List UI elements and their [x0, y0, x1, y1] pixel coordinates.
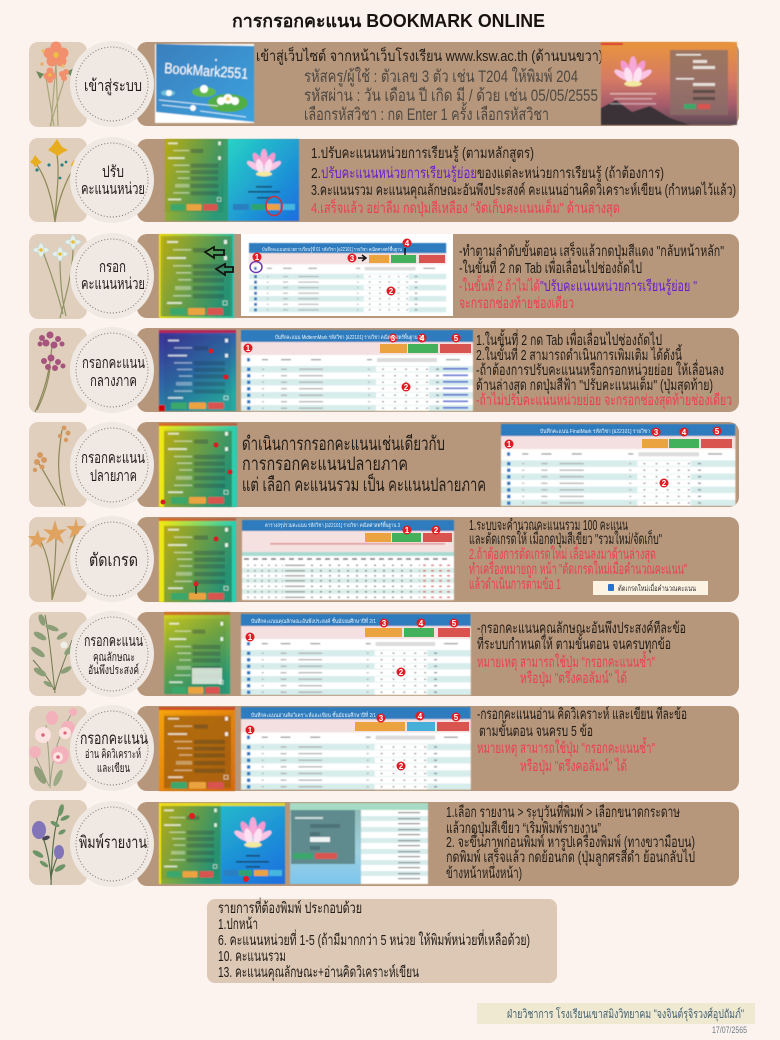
screenshot: score table: 5 — [715, 427, 720, 436]
screenshot: score table: 3 — [350, 254, 355, 263]
screenshot: score table: 4 — [418, 712, 423, 721]
text: steps — [311, 145, 736, 218]
screenshot: side form — [159, 330, 236, 411]
highlight circle — [266, 196, 282, 216]
text: description: การกรอกคะแนนปลายภาค — [242, 454, 408, 475]
text: website instructions — [256, 46, 603, 124]
screenshot: score table: 5 — [452, 619, 457, 628]
circle label: และเขียน — [97, 761, 130, 775]
text: steps: หมายเหตุ สามารถใช้ปุ่ม "กรอกคะแนนซ้ำ" — [477, 737, 655, 758]
circle label — [70, 137, 154, 223]
main bar — [137, 517, 739, 602]
screenshot: score table: 1 — [246, 344, 251, 353]
text: steps: ปรับคะแนนหน่วยการเรียนรู้ย่อย — [321, 165, 477, 182]
screenshot: side form — [164, 612, 230, 696]
text: steps: ตามขั้นตอน จนครบ 5 ข้อ — [479, 720, 593, 740]
circle label: ตัดเกรด — [89, 550, 138, 570]
flower panel — [29, 138, 87, 222]
screenshot: print preview — [290, 803, 428, 884]
text: description — [242, 433, 486, 496]
checkbox callout — [593, 581, 708, 595]
text: steps — [459, 240, 724, 312]
text: steps: 1.ในขั้นที่ 2 กด Tab เพื่อเลื่อนไปช่องถัดไป — [476, 329, 662, 349]
screenshot: score table: 3 — [654, 428, 659, 437]
circle label — [70, 233, 154, 319]
flower panel — [29, 706, 87, 791]
circle label — [70, 327, 154, 413]
main bar — [137, 234, 739, 318]
circle label: กรอกคะแนน — [80, 729, 148, 748]
circle label: ปรับ — [102, 164, 124, 181]
flower panel — [29, 234, 87, 319]
text: steps: -ในขั้นที่ 2 กด Tab เพื่อเลื่อนไปช่องถัดไป — [459, 257, 642, 277]
text: website instructions: เลือกรหัสวิชา : กด Enter 1 ครั้ง เลือกรหัสวิชา — [304, 102, 549, 124]
text: steps: ข้างหน้าหนึ่งหน้า) — [446, 862, 522, 882]
flower panel — [29, 328, 87, 413]
panel: items to print: 13. คะแนนคุณลักษณะ+อ่านคิดวิเคราะห์เขียน — [218, 964, 419, 982]
circle label: คะแนนหน่วย — [81, 276, 145, 293]
footer: date: 17/07/2565 — [712, 1025, 747, 1035]
panel: items to print: รายการที่ต้องพิมพ์ ประกอบด้วย — [218, 897, 362, 917]
image: BookMark2551 banner — [155, 44, 254, 123]
screenshot: side form — [159, 234, 234, 318]
panel: items to print: 1.ปกหน้า — [218, 916, 258, 933]
circle label: อ่าน คิดวิเคราะห์ — [85, 747, 141, 761]
circle label: ปลายภาค — [90, 468, 137, 485]
text: steps — [476, 329, 732, 410]
text: steps: 4.เสร็จแล้ว อย่าลืม กดปุ่มสีเหลือง "จัดเก็บคะแนนเต็ม" ด้านล่างสุด — [311, 198, 620, 218]
circle label: คุณลักษณะ — [93, 650, 135, 665]
screenshot: score table: 1 — [248, 633, 253, 642]
screenshot: score table: 1 — [255, 253, 260, 262]
text: steps — [477, 706, 687, 776]
circle label — [70, 801, 154, 887]
flower panel — [28, 517, 87, 602]
text: steps — [469, 517, 687, 593]
row 7: character scores — [29, 611, 739, 697]
screenshot: summary table: ตารางสรุปรวมคะแนน รหัสวิชา [อ22101] รายวิชา คณิตศาสตร์พื้นฐาน 3 — [265, 521, 400, 529]
screenshot: score table: บันทึกคะแนนคุณลักษณะอันพึงประสงค์ ชั้นมัธยมศึกษาปีที่ 2/1 — [251, 617, 376, 625]
main bar — [137, 706, 739, 791]
screenshot: score table — [241, 234, 453, 316]
circle label: เข้าสู่ระบบ — [84, 77, 142, 96]
screenshot: summary table: 1 — [405, 526, 410, 535]
row 2: adjust unit scores — [29, 137, 739, 223]
arrow icons — [205, 247, 233, 275]
screenshot: score table: 2 — [389, 287, 394, 296]
screenshot: summary table — [242, 520, 454, 600]
row 4: midterm — [29, 327, 739, 413]
row 3: enter unit scores — [29, 233, 739, 319]
row 8: reading, analysis, writing — [29, 705, 739, 791]
screenshot: score table: 1 — [248, 726, 253, 735]
circle label: คะแนนหน่วย — [81, 181, 145, 198]
screenshot: score table: 4 — [419, 619, 424, 628]
screenshot: score table: บันทึกคะแนน FinalMark รหัสวิชา [อ22101] รายวิชา — [540, 428, 650, 435]
text: steps — [446, 801, 695, 882]
flower panel — [29, 612, 87, 696]
circle label: กลางภาค — [90, 373, 137, 390]
screenshot: score table: 3 — [391, 334, 396, 343]
screenshot: score table: 3 — [379, 714, 384, 723]
text: website instructions: เข้าสู่เว็บไซต์ จากหน้าเว็บโรงเรียน www.ksw.ac.th (ด้านบนขวา) — [256, 46, 603, 65]
circle label — [70, 516, 154, 602]
main bar — [137, 139, 739, 222]
circle label — [70, 705, 154, 791]
screenshot: score settings — [165, 139, 299, 221]
screenshot: score table — [501, 424, 735, 506]
screenshot: score table: 4 — [405, 239, 410, 248]
title: การกรอกคะแนน BOOKMARK ONLINE — [232, 11, 545, 31]
screenshot: side form — [159, 423, 237, 507]
row 5: final term — [29, 422, 739, 508]
text: steps: หมายเหตุ สามารถใช้ปุ่ม "กรอกคะแนนซ้ำ" — [477, 651, 655, 672]
text: description: ดำเนินการกรอกคะแนนเช่นเดียวกับ — [242, 433, 445, 455]
flower panel — [29, 42, 87, 127]
text: steps: "ปรับคะแนนหน่วยการเรียนรู้ย่อย " — [540, 278, 697, 295]
screenshot: score table: 2 — [399, 762, 404, 771]
panel: items to print — [207, 897, 557, 983]
text: steps: ที่ระบบกำหนดให้ ตามขั้นตอน จนครบทุกข้อ — [477, 633, 671, 654]
screenshot: side form — [159, 518, 236, 602]
row 9: print report — [29, 800, 739, 887]
text: steps: 1.ระบบจะคำนวณคะแนนรวม 100 คะแนน — [469, 517, 628, 534]
circle label: กรอกคะแนน — [84, 633, 143, 650]
text: steps — [477, 620, 686, 688]
row 1: login — [29, 41, 739, 127]
markers on menu — [189, 813, 249, 882]
markers on form — [208, 348, 228, 380]
text: steps: -ในขั้นที่ 2 ถ้าไม่ได้ — [459, 275, 540, 295]
flower panel — [29, 422, 87, 507]
screenshot: summary table: 2 — [434, 526, 439, 535]
screenshot: score table: 5 — [454, 334, 459, 343]
text: steps: ของแต่ละหน่วยการเรียนรู้ (ถ้าต้องการ) — [477, 165, 664, 182]
screenshot: score table: 5 — [454, 713, 459, 722]
main bar — [137, 802, 739, 886]
image: BookMark2551 banner: BookMark2551 — [164, 60, 249, 83]
circle label — [70, 611, 154, 697]
screenshot: score table — [241, 707, 471, 790]
circle label: กรอกคะแนน — [82, 355, 145, 372]
text: steps: จะกรอกช่องท้ายช่องเดียว — [459, 295, 574, 312]
circle label — [70, 422, 154, 508]
text: steps: 2.ถ้าต้องการตัดเกรดใหม่ เลื่อนลงมาด้านล่างสุด — [469, 543, 656, 564]
circle label: กรอก — [99, 259, 126, 276]
screenshot: score table — [241, 614, 471, 695]
screenshot: score table: 2 — [404, 383, 409, 392]
circle label: อันพึงประสงค์ — [88, 663, 139, 677]
text: steps: หรือปุ่ม "ตรึงคอลัมน์" ได้ — [520, 669, 627, 688]
screenshot: report menu — [159, 803, 285, 884]
main bar — [137, 422, 739, 507]
text: steps: แล้วกดปุ่มสีเขียว “เริ่มพิมพ์รายงาน” — [446, 817, 601, 838]
screenshot: score table — [241, 330, 473, 411]
screenshot: score table: 4 — [682, 428, 687, 437]
circle label: กรอกคะแนน — [81, 450, 145, 467]
footer: school — [477, 1003, 755, 1024]
circle label: พิมพ์รายงาน — [79, 833, 147, 852]
text: steps: 1.ปรับคะแนนหน่วยการเรียนรู้ (ตามหลักสูตร) — [311, 145, 534, 162]
text: steps: 2. — [311, 165, 321, 182]
screenshot: side form — [159, 707, 235, 791]
screenshot: score table: บันทึกคะแนน MidtermMark รหัสวิชา [อ22101] รายวิชา คณิตศาสตร์พื้นฐาน 2/1 — [275, 333, 425, 341]
text: steps: 2.ในขั้นที่ 2 สามารถดำเนินการเพิ่มเติม ได้ดังนี้ — [476, 344, 682, 364]
text: steps: และตัดเกรดให้ เมื่อกดปุ่มสีเขียว "รวมใหม่/จัดเก็บ" — [469, 528, 662, 549]
screenshot: score table: 2 — [399, 668, 404, 677]
main bar — [137, 328, 739, 412]
screenshot: score table: 3 — [382, 619, 387, 628]
flower panel — [29, 800, 87, 885]
text: description: แต่ เลือก คะแนนรวม เป็น คะแนนปลายภาค — [242, 472, 486, 496]
main bar — [137, 42, 739, 126]
markers on form — [160, 442, 232, 504]
screenshot: score table: 1 — [507, 440, 512, 449]
row 6: grading — [28, 516, 739, 602]
screenshot: score table: 2 — [662, 479, 667, 488]
circle label — [70, 41, 154, 127]
text: steps: หรือปุ่ม "ตรึงคอลัมน์" ได้ — [520, 757, 627, 776]
text: steps: แล้วดำเนินการตามข้อ 1 — [469, 576, 561, 593]
markers on form — [194, 536, 218, 594]
text: steps: 1.เลือก รายงาน > ระบุวันที่พิมพ์ > เลือกขนาดกระดาษ — [446, 801, 680, 822]
screenshot: score table: 4 — [420, 334, 425, 343]
screenshot: score table: บันทึกคะแนนอ่านคิดวิเคราะห์และเขียน ชั้นมัธยมศึกษาปีที่ 2/1 — [251, 711, 376, 719]
text: website instructions: รหัสครู/ผู้ใช้ : ตัวเลข 3 ตัว เช่น T204 ให้พิมพ์ 204 — [304, 66, 578, 87]
main bar — [137, 612, 739, 696]
image: sunset login screen — [601, 42, 737, 125]
checkbox callout: ตัดเกรดใหม่เมื่อคำนวณคะแนน — [618, 582, 696, 593]
panel: items to print: 6. คะแนนหน่วยที่ 1-5 (ถ้ามีมากกว่า 5 หน่วย ให้พิมพ์หน่วยที่เหลือด้วย) — [218, 929, 530, 949]
panel: items to print: 10. คะแนนรวม — [218, 948, 286, 965]
screenshot: score table: บันทึกคะแนนหน่วยการเรียนรู้ที่ 01 รหัสวิชา [อ22101] รายวิชา คณิตศาสตร์พื้นฐาน — [262, 244, 402, 253]
text: steps: -กรอกคะแนนคุณลักษณะอันพึงประสงค์ทีละข้อ — [477, 620, 686, 638]
text: website instructions: รหัสผ่าน : วัน เดือน ปี เกิด มี / ด้วย เช่น 05/05/2555 — [304, 86, 598, 105]
